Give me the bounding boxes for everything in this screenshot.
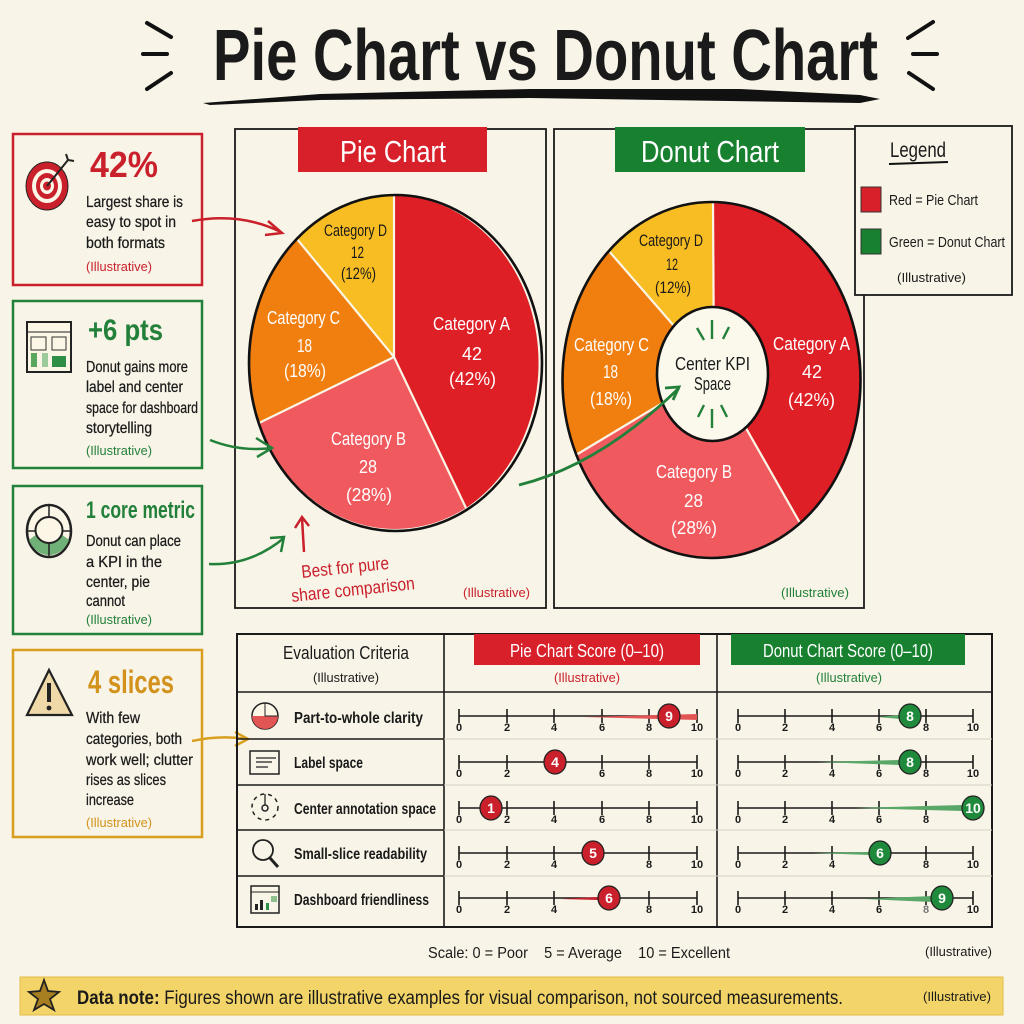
arrow: donut center link <box>519 387 679 485</box>
donut score axes: 2 <box>782 768 788 780</box>
donut chart graphic <box>562 202 860 558</box>
callout: 1 core metric: (Illustrative) <box>86 612 152 627</box>
legend <box>855 126 1012 295</box>
score markers: pie: 5 <box>589 845 597 861</box>
callout: 42%: both formats <box>86 235 165 252</box>
pie score axes: 2 <box>504 722 510 734</box>
callout: +6 pts: (Illustrative) <box>86 443 152 458</box>
center KPI space <box>657 307 768 441</box>
pie chart graphic: Category A <box>433 314 510 334</box>
donut score axes: 8 <box>923 768 929 780</box>
pie chart graphic: Category C <box>267 308 340 328</box>
header: evaluation criteria: Evaluation Criteria <box>283 643 410 663</box>
pie score axes: 6 <box>599 722 605 734</box>
pie score axes: 8 <box>646 859 652 871</box>
donut score axes: 10 <box>967 768 979 780</box>
pie chart graphic: Category B <box>331 429 406 449</box>
callout: +6 pts: storytelling <box>86 420 152 437</box>
score markers: donut: 9 <box>938 890 946 906</box>
legend: Red = Pie Chart <box>889 192 979 209</box>
header: pie score <box>474 634 700 685</box>
donut score axes: 10 <box>967 859 979 871</box>
callout: 4 slices: (Illustrative) <box>86 815 152 830</box>
callout: 4 slices: rises as slices <box>86 772 166 789</box>
pie chart graphic: Category D <box>324 221 387 240</box>
panel: donut chart: (Illustrative) <box>781 585 849 600</box>
data note banner: (Illustrative) <box>923 989 991 1004</box>
donut score axes: 0 <box>735 722 741 734</box>
scale note <box>428 944 992 962</box>
callout: 42%: Largest share is <box>86 194 183 211</box>
donut chart graphic: Category D <box>639 231 703 250</box>
row: part-to-whole clarity: Part-to-whole clarity <box>294 710 423 727</box>
callout: 1 core metric: center, pie <box>86 574 150 591</box>
pie chart graphic: (18%) <box>284 361 326 381</box>
callout: 42% <box>13 134 202 285</box>
donut chart graphic: (18%) <box>590 389 632 409</box>
callout: 1 core metric: cannot <box>86 593 125 610</box>
pie score axes: 10 <box>691 722 703 734</box>
donut score axes: 8 <box>923 904 929 916</box>
donut chart graphic: 28 <box>684 491 703 511</box>
pie chart graphic: 18 <box>297 336 312 356</box>
callout: +6 pts: +6 pts <box>88 314 163 347</box>
center KPI space: Space <box>694 374 731 394</box>
pie score axes: 0 <box>456 814 462 826</box>
callout: 4 slices: work well; clutter <box>85 752 194 769</box>
annotation: best for pure share comparison: Best for pure <box>300 553 390 582</box>
score markers: donut: 8 <box>906 754 914 770</box>
donut chart graphic: 18 <box>603 362 618 382</box>
pie chart graphic: (12%) <box>341 264 376 283</box>
score markers: pie: 4 <box>551 754 559 770</box>
row: dashboard friendliness <box>251 886 429 913</box>
heading: donut chart: Donut Chart <box>641 134 779 169</box>
pie score axes: 2 <box>504 768 510 780</box>
icon: dashed center circle <box>252 794 278 820</box>
score markers: pie: 9 <box>665 708 673 724</box>
pie score axes: 6 <box>599 768 605 780</box>
callout: 1 core metric <box>13 486 202 634</box>
donut chart graphic: 12 <box>666 255 678 274</box>
donut score axes: 6 <box>876 768 882 780</box>
pie chart graphic: 12 <box>351 243 364 262</box>
icon: pie <box>252 703 278 729</box>
donut score axes: 0 <box>735 814 741 826</box>
donut score axes: 2 <box>782 859 788 871</box>
row: center annotation space <box>252 794 436 820</box>
header: pie score: (Illustrative) <box>554 670 620 685</box>
score markers: donut: 8 <box>906 708 914 724</box>
row: label space <box>250 751 363 774</box>
pie chart graphic <box>249 195 542 531</box>
row: part-to-whole clarity <box>252 703 423 729</box>
icon: donut ring <box>27 505 71 557</box>
pie score axes: 0 <box>456 722 462 734</box>
callout: +6 pts: Donut gains more <box>86 359 188 376</box>
arrow: 42% to pie <box>192 218 282 235</box>
pie score axes: 4 <box>551 814 558 826</box>
score markers: pie: 6 <box>605 890 613 906</box>
donut chart graphic: Category A <box>773 334 850 354</box>
pie chart graphic: 28 <box>359 457 377 477</box>
center KPI space: Center KPI <box>675 354 750 374</box>
data note banner: Data note: Figures shown are illustrative examples for visual comparison, not sourced measurements. <box>77 988 843 1009</box>
icon: label card <box>250 751 279 774</box>
score markers: pie: 1 <box>487 800 495 816</box>
pie score axes: 10 <box>691 859 703 871</box>
header: evaluation criteria <box>283 643 410 685</box>
pie score axes <box>456 704 703 916</box>
pie score axes: 2 <box>504 904 510 916</box>
donut score axes: 8 <box>923 722 929 734</box>
annotation: best for pure share comparison: share comparison <box>290 573 416 606</box>
donut score axes: 8 <box>923 859 929 871</box>
pie score axes: 8 <box>646 722 652 734</box>
donut chart graphic: 42 <box>802 362 822 382</box>
donut chart graphic: (12%) <box>655 278 691 297</box>
pie score axes: 10 <box>691 904 703 916</box>
pie score axes: 6 <box>599 814 605 826</box>
donut chart graphic: (28%) <box>671 518 717 538</box>
donut score axes: 10 <box>967 722 979 734</box>
donut score axes: 4 <box>829 768 836 780</box>
legend: Legend <box>890 139 946 162</box>
header: donut score <box>731 634 965 685</box>
donut chart graphic: (42%) <box>788 390 835 410</box>
panel: pie chart <box>235 127 546 608</box>
donut score axes: 10 <box>967 904 979 916</box>
donut chart graphic: Category B <box>656 462 732 482</box>
row: small-slice readability <box>253 840 427 867</box>
callout: 4 slices: increase <box>86 792 134 809</box>
header: donut score: (Illustrative) <box>816 670 882 685</box>
scale note: (Illustrative) <box>925 944 992 959</box>
heading: pie chart <box>298 127 487 172</box>
donut score axes: 6 <box>876 904 882 916</box>
donut score axes: 4 <box>829 859 836 871</box>
pie score axes: 10 <box>691 768 703 780</box>
donut score axes: 0 <box>735 768 741 780</box>
icon: dashboard <box>27 322 71 372</box>
arrow: core metric to pie <box>209 537 284 564</box>
row: center annotation space: Center annotation space <box>294 801 436 818</box>
pie score axes: 4 <box>551 859 558 871</box>
pie chart graphic: (28%) <box>346 485 392 505</box>
icon: dashboard small <box>251 886 279 913</box>
heading: donut chart <box>615 127 805 172</box>
donut score axes: 4 <box>829 904 836 916</box>
icon: magnifier <box>253 840 278 867</box>
pie score axes: 8 <box>646 904 652 916</box>
row: small-slice readability: Small-slice readability <box>294 846 427 863</box>
donut score axes: 4 <box>829 814 836 826</box>
row: label space: Label space <box>294 755 363 772</box>
callout: 1 core metric: Donut can place <box>86 533 181 550</box>
callout: 4 slices <box>13 650 202 837</box>
pie score axes: 2 <box>504 859 510 871</box>
callout: +6 pts: space for dashboard <box>86 400 198 417</box>
pie score axes: 4 <box>551 722 558 734</box>
pie chart graphic: (42%) <box>449 369 496 389</box>
donut score axes: 4 <box>829 722 836 734</box>
donut score axes: 0 <box>735 859 741 871</box>
donut score axes: 2 <box>782 722 788 734</box>
donut score axes: 2 <box>782 814 788 826</box>
callout: 42%: (Illustrative) <box>86 259 152 274</box>
callout: 4 slices: 4 slices <box>88 664 174 700</box>
donut score axes: 6 <box>876 722 882 734</box>
pie score axes: 2 <box>504 814 510 826</box>
pie chart graphic: 42 <box>462 344 482 364</box>
arrow: +6 pts to pie <box>210 438 272 457</box>
callout: 1 core metric: a KPI in the <box>86 554 162 571</box>
header: donut score: Donut Chart Score (0–10) <box>763 641 933 661</box>
donut score axes: 6 <box>876 814 882 826</box>
callout: 42%: 42% <box>90 144 158 185</box>
icon: star <box>29 980 59 1010</box>
heading: pie chart: Pie Chart <box>340 134 446 169</box>
score markers: pie <box>480 704 680 910</box>
panel: pie chart: (Illustrative) <box>463 585 530 600</box>
data note banner <box>20 977 1003 1015</box>
callout: 42%: easy to spot in <box>86 214 176 231</box>
annotation: best for pure share comparison <box>290 517 416 606</box>
callout: 1 core metric: 1 core metric <box>86 497 195 524</box>
pie score axes: 0 <box>456 859 462 871</box>
score markers: donut <box>869 704 984 910</box>
header: pie score: Pie Chart Score (0–10) <box>510 641 664 661</box>
callout: 4 slices: With few <box>86 710 140 727</box>
header: evaluation criteria: (Illustrative) <box>313 670 379 685</box>
donut score axes <box>735 704 984 916</box>
score markers: donut: 6 <box>876 845 884 861</box>
scale note: Scale: 0 = Poor 5 = Average 10 = Excellent <box>428 945 730 962</box>
score markers: donut: 10 <box>965 800 981 816</box>
pie score axes: 8 <box>646 814 652 826</box>
donut chart graphic: Category C <box>574 335 649 355</box>
pie score axes: 4 <box>551 904 558 916</box>
donut score axes: 2 <box>782 904 788 916</box>
callout: +6 pts: label and center <box>86 379 184 396</box>
row: dashboard friendliness: Dashboard friendliness <box>294 892 429 909</box>
pie score axes: 10 <box>691 814 703 826</box>
arrow: 4 slices to table <box>192 732 248 746</box>
donut score axes: 8 <box>923 814 929 826</box>
donut score axes: 0 <box>735 904 741 916</box>
callout: +6 pts <box>13 301 202 468</box>
callout: 4 slices: categories, both <box>86 731 182 748</box>
icon: warning triangle <box>27 670 72 715</box>
pie score axes: 8 <box>646 768 652 780</box>
pie score axes: 0 <box>456 768 462 780</box>
icon: target <box>26 154 74 210</box>
score table <box>237 634 992 927</box>
panel: donut chart <box>554 127 864 608</box>
pie score axes: 0 <box>456 904 462 916</box>
legend: (Illustrative) <box>897 270 966 285</box>
